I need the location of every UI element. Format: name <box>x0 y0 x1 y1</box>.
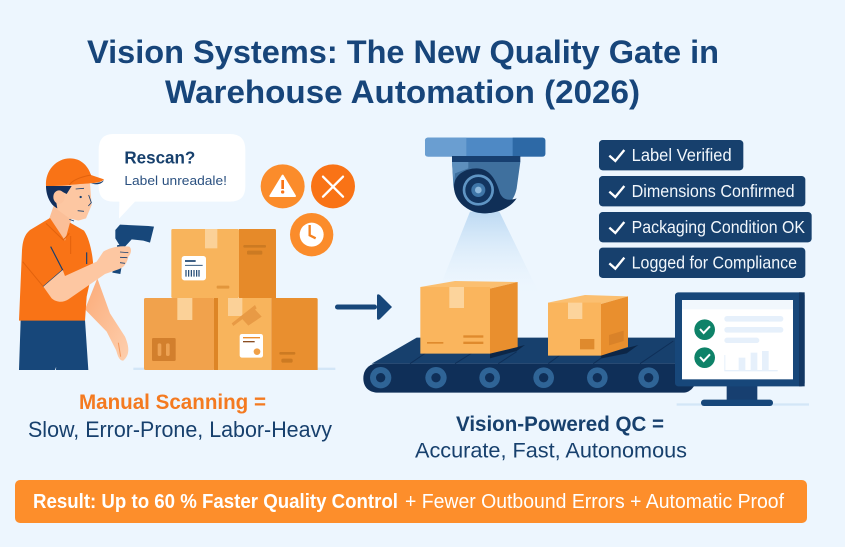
result banner: + Fewer Outbound Errors + Automatic Proof <box>405 491 784 513</box>
icon: clock <box>290 213 333 256</box>
large box on belt <box>420 281 525 358</box>
badge: dimensions confirmed: Dimensions Confirmed <box>632 181 795 201</box>
panel: manual scanning illustration <box>99 134 355 370</box>
caption: vision-powered QC: Vision-Powered QC = <box>456 413 664 436</box>
result banner: Result: Up to 60 % Faster Quality Control <box>33 491 398 513</box>
badge: dimensions confirmed <box>599 176 805 206</box>
icon: warning <box>261 164 305 208</box>
conveyor <box>363 338 700 393</box>
badge: logged for compliance <box>599 248 805 278</box>
monitor <box>675 292 809 406</box>
pocket and sleeve lines <box>43 247 87 287</box>
shirt <box>19 218 93 321</box>
caption: vision-powered QC: Accurate, Fast, Autonomous <box>415 440 687 462</box>
title: Vision Systems: The New Quality Gate in <box>87 34 719 70</box>
head <box>53 183 92 221</box>
scanner <box>112 225 154 274</box>
check badges <box>599 140 812 278</box>
camera <box>425 138 545 213</box>
badge: label verified: Label Verified <box>632 145 732 165</box>
left bottom box <box>144 298 218 370</box>
caption: manual scanning: Slow, Error-Prone, Labor-Heavy <box>28 417 332 442</box>
forearm and hand <box>43 246 131 302</box>
small box on belt <box>548 295 638 358</box>
speech bubble: Label unreadale! <box>124 174 227 188</box>
badge: packaging condition <box>599 212 812 242</box>
title: Warehouse Automation (2026) <box>165 74 640 110</box>
worker with scanner <box>19 158 154 370</box>
speech bubble: Rescan? <box>124 148 195 168</box>
result banner <box>15 480 807 523</box>
far arm <box>85 278 128 361</box>
badge: packaging condition: Packaging Condition OK <box>632 217 805 237</box>
cap <box>46 158 104 186</box>
light beam <box>437 212 540 295</box>
top box <box>171 229 276 298</box>
title <box>87 34 719 110</box>
neck <box>49 207 72 241</box>
arrow <box>335 294 392 320</box>
right bottom box <box>218 298 318 370</box>
badge: logged for compliance: Logged for Compliance <box>632 253 797 273</box>
caption: manual scanning <box>28 390 332 442</box>
trousers <box>19 320 88 370</box>
floor line <box>133 368 335 370</box>
icon: error x <box>311 164 355 208</box>
caption: manual scanning: Manual Scanning = <box>79 390 266 414</box>
badge: label verified <box>599 140 743 170</box>
speech bubble <box>99 134 245 219</box>
status checks <box>694 319 715 368</box>
panel: vision inspection illustration <box>363 138 812 406</box>
caption: vision-powered QC <box>415 413 687 462</box>
